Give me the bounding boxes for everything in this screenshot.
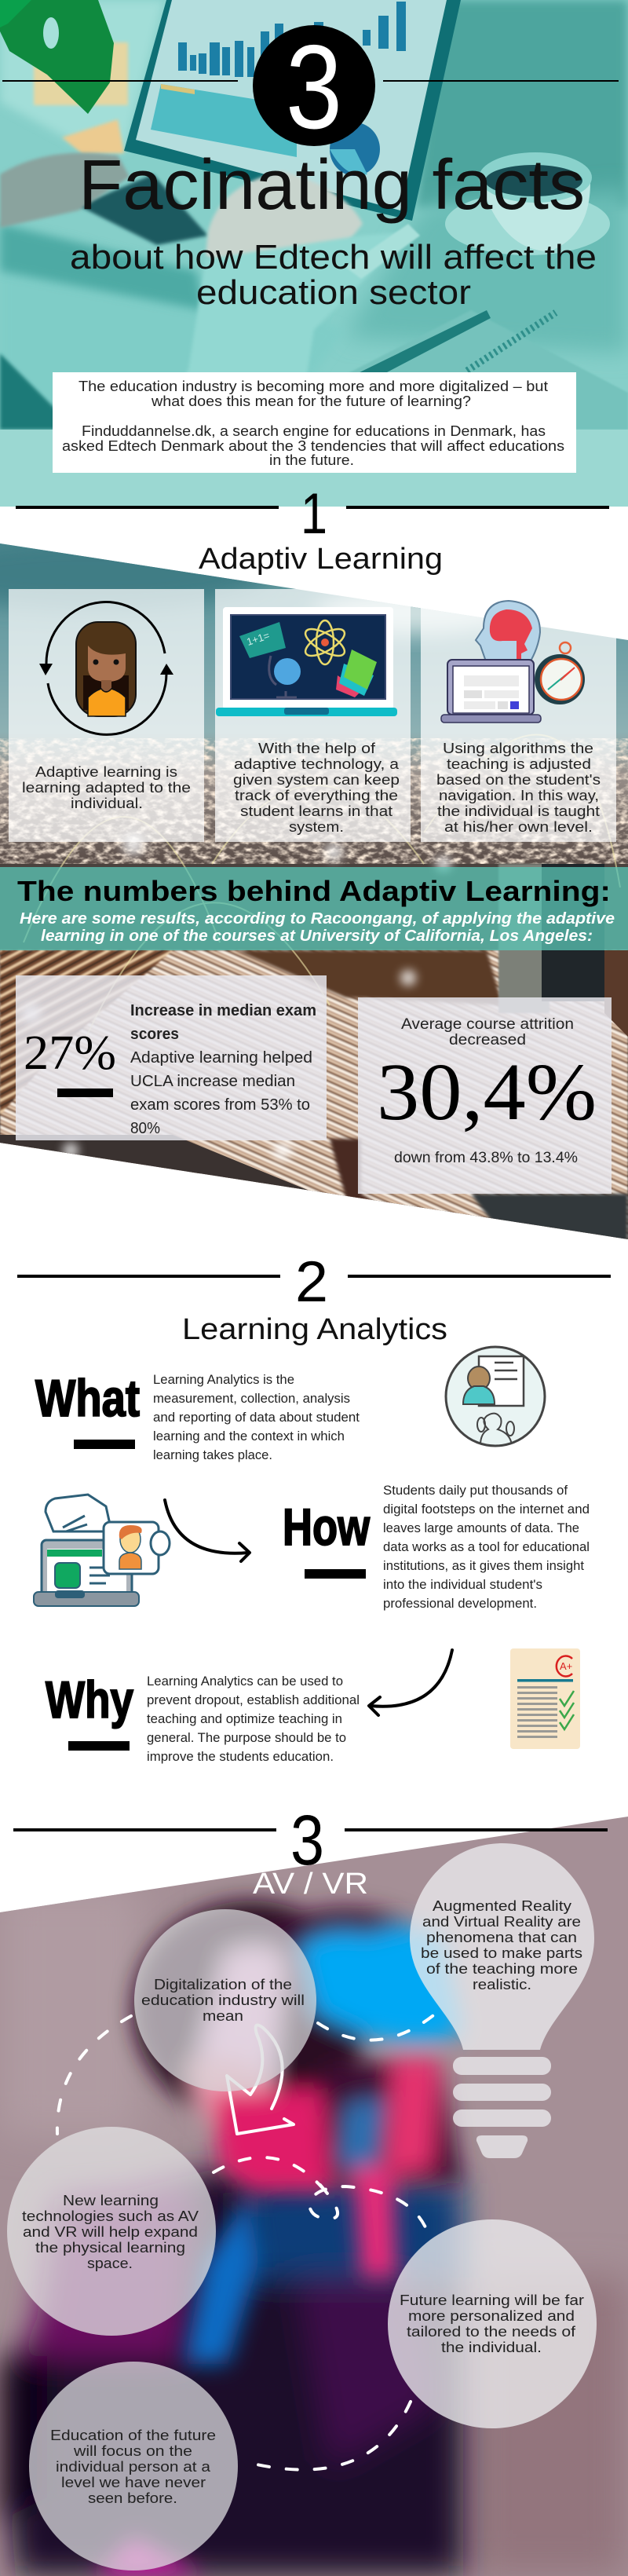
text: adaptive technology (233, 741, 400, 835)
bubble: digitalization: mean (203, 2008, 243, 2024)
bubble: education of the future: seen before. (88, 2490, 177, 2506)
icon: laptop with school subjects (216, 607, 397, 716)
panel: intro text: Finduddannelse.dk, a search engine for educations in Denmark, has (82, 423, 546, 439)
heading: numbers: The numbers behind Adaptiv Learning: (17, 875, 611, 907)
panel: algorithms (421, 589, 616, 842)
panel: intro text: The education industry is becoming more and more digitalized – but (78, 379, 548, 394)
icon: black circle with number 3 (253, 20, 375, 154)
text: adaptive learning: Adaptive learning is (35, 764, 177, 780)
text: exam scores: UCLA increase median (130, 1073, 295, 1090)
section 1 rule and number (16, 482, 609, 546)
panel: intro text: what does this mean for the future of learning? (151, 393, 471, 409)
text: why: improve the students education. (147, 1750, 334, 1764)
arrow: to why (369, 1650, 452, 1715)
text: exam scores: exam scores from 53% to (130, 1096, 310, 1114)
subtitle: education sector (196, 273, 471, 312)
notebook, pen and spiral (350, 309, 628, 430)
bubble: new learning technologies: space. (87, 2256, 133, 2271)
icon: laptop with school subjects: 1+1= (245, 629, 271, 648)
bubble: future learning: tailored to the needs of (407, 2324, 576, 2340)
bubble: future learning: Future learning will be far (400, 2292, 584, 2308)
panel: adaptive learning (9, 589, 204, 842)
laptop screen with charts (124, 0, 461, 221)
heading: AV / VR: AV / VR (253, 1868, 368, 1901)
icon: online learner at laptop (34, 1495, 170, 1606)
section 1 photo: city at night with light trails (0, 534, 628, 1257)
section 2 rule and number: 2 (295, 1250, 328, 1314)
text: why: prevent dropout, establish additional (147, 1693, 360, 1707)
text: how: digital footsteps on the internet and (383, 1502, 590, 1517)
text: why: general. The purpose should be to (147, 1731, 346, 1745)
bubble: new learning technologies: New learning (63, 2193, 159, 2208)
text: algorithms: navigation. In this way, (439, 788, 599, 803)
bubble: digitalization: Digitalization of the (154, 1977, 292, 1992)
text: what: measurement, collection, analysis (153, 1392, 350, 1406)
bubble: new learning technologies: technologies such as AV (22, 2208, 199, 2224)
subtitle: about how Edtech will affect the (70, 238, 597, 276)
icon: graded test paper (510, 1648, 580, 1749)
label: How: How (283, 1498, 371, 1556)
bubble: education of the future: level we have never (61, 2475, 206, 2490)
bubble: education of the future: individual person at a (56, 2459, 211, 2475)
text: algorithms: teaching is adjusted (447, 756, 591, 772)
light teal band under the header (0, 430, 628, 507)
text: exam scores: 80% (130, 1120, 160, 1137)
icon: graded test paper: A+ (560, 1660, 572, 1672)
stat: 27%: 27% (24, 1026, 116, 1080)
subheading: source of results: learning in one of the courses at University of California, Los Angeles: (41, 928, 593, 945)
panel: 30,4 percent stat (358, 997, 612, 1194)
text: how: professional development. (383, 1597, 537, 1611)
text: algorithms: based on the student's (436, 772, 601, 788)
arrow: to how (165, 1500, 250, 1561)
bubble: light bulb with AR and VR text: realistic. (473, 1977, 531, 1992)
text: adaptive technology: adaptive technology, a (234, 756, 400, 772)
icon: monstera leaf (0, 0, 114, 114)
heading: Adaptiv Learning: Adaptiv Learning (199, 543, 443, 576)
section 3 rule and number: 3 (290, 1802, 324, 1880)
stat: 30,4%: 30,4% (377, 1047, 597, 1137)
label: Why: Why (46, 1670, 133, 1729)
panel: adaptive technology (215, 589, 411, 842)
bubble: new learning technologies: the physical learning (35, 2240, 185, 2256)
bubble: future learning: more personalized and (408, 2308, 575, 2324)
hands and keyboard (0, 151, 421, 372)
subheading: source of results: Here are some results, according to Racoongang, of applying the adaptive (20, 910, 615, 928)
bubble: light bulb with AR and VR text (410, 1843, 594, 2158)
bubble: new learning technologies (7, 2127, 216, 2336)
panel: intro text: asked Edtech Denmark about the 3 tendencies that will affect educations (62, 438, 564, 454)
text: algorithms: Using algorithms the (443, 741, 593, 756)
text: exam scores (130, 1002, 316, 1137)
text: why (147, 1674, 360, 1764)
text: exam scores: Increase in median exam (130, 1002, 316, 1019)
header rules (2, 80, 619, 82)
block: what (35, 1369, 360, 1462)
subheading: source of results (20, 910, 615, 945)
text: how (383, 1484, 590, 1611)
title: Facinating facts (78, 146, 585, 225)
text: attrition (401, 1016, 574, 1048)
bubble: education of the future: Education of the future (50, 2428, 216, 2443)
bubble: digitalization (134, 1909, 316, 2091)
text: attrition: Average course attrition (401, 1016, 574, 1033)
text: why: Learning Analytics can be used to (147, 1674, 343, 1689)
text: adaptive technology: With the help of (258, 741, 376, 756)
icon: head, brain, laptop and compass (441, 601, 585, 723)
text: adaptive learning: learning adapted to the (22, 780, 191, 796)
text: what: Learning Analytics is the (153, 1373, 294, 1387)
block: how (283, 1484, 590, 1611)
dashed connectors (57, 2013, 436, 2470)
text: how: data works as a tool for educational (383, 1540, 590, 1554)
section 2 rule and number (17, 1250, 611, 1314)
text: adaptive learning (22, 764, 191, 811)
bubble: new learning technologies: and VR will help expand (23, 2224, 198, 2240)
text: what (153, 1373, 360, 1462)
text: exam scores: Adaptive learning helped (130, 1049, 312, 1067)
text: adaptive technology: system. (289, 819, 344, 835)
bubble: light bulb with AR and VR text: of the teaching more (426, 1961, 578, 1977)
text: what: learning and the context in which (153, 1429, 345, 1444)
text: how: leaves large amounts of data. The (383, 1521, 579, 1535)
text: adaptive technology: student learns in that (240, 803, 392, 819)
label: What: What (35, 1369, 140, 1427)
bubble: digitalization: education industry will (141, 1992, 305, 2008)
section 3 photo: blurred person with VR headset (0, 1806, 628, 2576)
section 1 rule and number: 1 (301, 482, 327, 546)
icon: black circle with number 3: 3 (286, 20, 342, 154)
bubble: education of the future (29, 2362, 238, 2571)
text: what: and reporting of data about student (153, 1411, 360, 1425)
text: how: institutions, as it gives them insight (383, 1559, 584, 1573)
bubble: light bulb with AR and VR text: phenomena that can (426, 1930, 577, 1945)
panel: intro text (53, 372, 576, 473)
bubble: future learning: the individual. (441, 2340, 542, 2355)
icon: teacher at board (446, 1347, 545, 1446)
bubble: education of the future: will focus on the (73, 2443, 192, 2459)
text: how: into the individual student's (383, 1578, 542, 1592)
bubble: future learning (388, 2219, 597, 2428)
text: adaptive technology: given system can keep (233, 772, 400, 788)
arrow: swirl (227, 2025, 294, 2134)
text: adaptive technology: track of everything the (235, 788, 398, 803)
bubble: light bulb with AR and VR text: be used to make parts (421, 1945, 582, 1961)
text: why: teaching and optimize teaching in (147, 1712, 342, 1726)
block: why (46, 1670, 360, 1764)
panel: 27 percent stat (16, 975, 327, 1140)
text: exam scores: scores (130, 1026, 179, 1043)
subtitle (70, 238, 597, 312)
heading: Learning Analytics: Learning Analytics (182, 1313, 447, 1346)
bubble: light bulb with AR and VR text: and Virtual Reality are (422, 1914, 581, 1930)
text: what: learning takes place. (153, 1448, 272, 1462)
text: algorithms (436, 741, 601, 835)
text: down from: down from 43.8% to 13.4% (394, 1150, 578, 1166)
text: algorithms: at his/her own level. (444, 819, 593, 835)
coffee cup (445, 152, 610, 255)
section 3 rule and number (13, 1802, 608, 1880)
text: algorithms: the individual is taught (437, 803, 600, 819)
band: the numbers behind adaptive learning (0, 867, 628, 950)
panel: intro text: in the future. (269, 452, 354, 468)
text: adaptive learning: individual. (71, 796, 143, 811)
icon: student with cycle arrows (39, 602, 173, 734)
bubble: light bulb with AR and VR text: Augmented Reality (433, 1898, 571, 1914)
text: how: Students daily put thousands of (383, 1484, 568, 1498)
text: attrition: decreased (449, 1032, 526, 1048)
header photo: laptop and coffee in teal duotone (0, 0, 628, 430)
